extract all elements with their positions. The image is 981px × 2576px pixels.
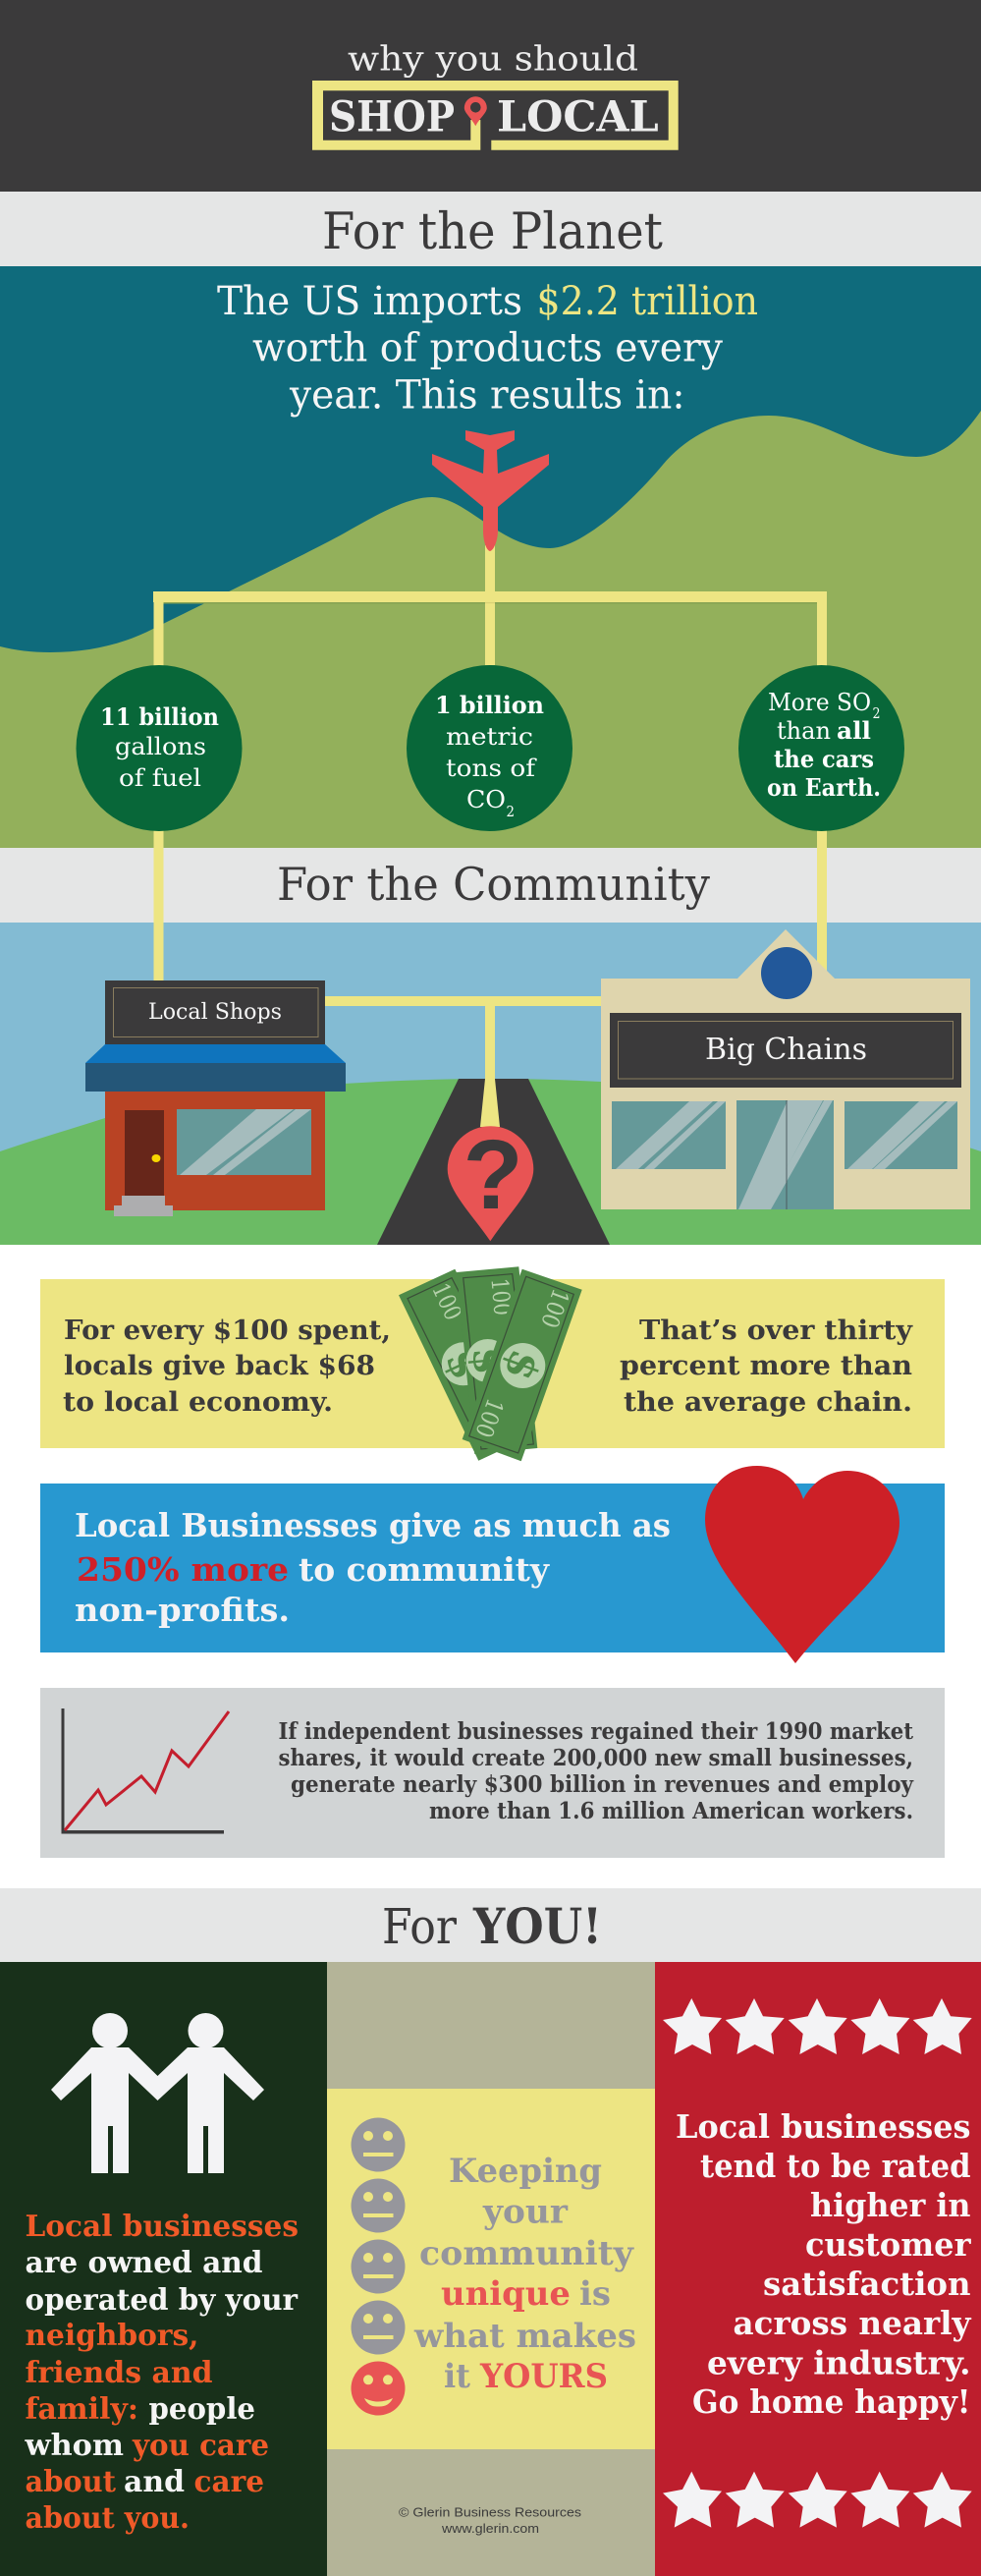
logo: shop local xyxy=(312,81,679,150)
text: owned by neighbors: friends and xyxy=(26,2356,213,2390)
text: keeping your community unique: unique xyxy=(441,2274,571,2313)
icon: dollar bills: 100 xyxy=(426,1279,467,1324)
text: rated higher: customer xyxy=(805,2225,971,2264)
text: market share claim: more than 1.6 million American workers. xyxy=(429,1798,913,1824)
icon: neutral face 3 xyxy=(352,2240,405,2293)
text: owned by neighbors: and xyxy=(124,2465,185,2499)
text: keeping your community unique: is xyxy=(579,2274,611,2313)
icon: smiling face xyxy=(352,2362,405,2415)
local shops sign xyxy=(105,980,325,1044)
panel: yellow stat card xyxy=(40,1266,945,1461)
stat: 1 billion metric tons of CO2: tons of xyxy=(446,755,537,782)
awning xyxy=(85,1044,346,1092)
text: 250 percent more xyxy=(75,1506,671,1629)
icon: airplane xyxy=(432,430,549,551)
text: imports statement xyxy=(217,279,758,419)
icon: dollar bills xyxy=(399,1266,582,1461)
panel: neighbors xyxy=(0,1962,327,2576)
heading: for the community: For the Community xyxy=(277,858,710,911)
heading: for you: For xyxy=(382,1898,457,1955)
icon: neutral face 2 xyxy=(352,2179,405,2232)
text: keeping your community unique xyxy=(413,2152,636,2395)
icon: dollar bills: $ xyxy=(463,1345,512,1376)
text: owned by neighbors: Local businesses xyxy=(26,2210,299,2244)
text: rated higher: Go home happy! xyxy=(692,2382,970,2421)
text: owned by neighbors: people xyxy=(149,2392,255,2427)
text: rated higher: across nearly xyxy=(733,2304,972,2342)
stat: more SO2 than all the cars on Earth: than xyxy=(777,717,831,745)
band: for the community background xyxy=(0,848,981,923)
icon: two people holding hands xyxy=(51,2013,264,2173)
text: keeping your community unique: YOURS xyxy=(479,2357,608,2395)
stat: more SO2 than all the cars on Earth: on Earth. xyxy=(767,773,881,802)
text: keeping your community unique: community xyxy=(419,2234,635,2272)
text: rated higher: higher in xyxy=(810,2186,970,2224)
text: every 100 dollars: to local economy. xyxy=(63,1386,333,1418)
panel: grey market share card xyxy=(40,1688,945,1858)
illustration: big chain store xyxy=(601,929,970,1209)
text: thirty percent more xyxy=(620,1315,913,1418)
panel: customer satisfaction xyxy=(655,1962,981,2576)
text: owned by neighbors: whom xyxy=(24,2429,124,2463)
stat: more SO2 than all the cars on Earth: 2 xyxy=(872,704,880,722)
steps xyxy=(114,1196,173,1216)
logo: shop local: LOCAL xyxy=(497,92,659,141)
text: owned by neighbors: care xyxy=(194,2465,264,2499)
text: market share claim: shares, it would create 200,000 new small businesses, xyxy=(279,1745,913,1771)
stat: 11 billion gallons of fuel xyxy=(77,665,242,831)
text: imports statement: The US imports xyxy=(217,279,522,324)
text: thirty percent more: percent more than xyxy=(620,1350,912,1381)
stat: more SO2 than all the cars on Earth: all xyxy=(837,716,871,745)
icon: top row of stars xyxy=(663,1998,972,2054)
stat: 11 billion gallons of fuel: of fuel xyxy=(119,764,201,792)
text: imports statement: year. This results in: xyxy=(289,373,685,419)
icon: dollar bills: 100 xyxy=(485,1277,517,1316)
right window xyxy=(845,1101,957,1169)
panel: keeping community unique xyxy=(327,1962,655,2576)
text: market share claim: If independent businesses regained their 1990 market xyxy=(279,1718,913,1745)
text: keeping your community unique: it xyxy=(444,2357,471,2395)
stat: more SO2 than all the cars on Earth xyxy=(738,665,904,831)
header xyxy=(0,0,981,192)
text: keeping your community unique: your xyxy=(482,2193,568,2230)
stat: 1 billion metric tons of CO2: metric xyxy=(446,723,533,751)
local shops sign: Local Shops xyxy=(148,1000,282,1025)
arrow: yellow connector tree xyxy=(153,545,827,984)
icon: heart xyxy=(705,1466,899,1663)
text: owned by neighbors: you care xyxy=(132,2429,269,2463)
road xyxy=(377,1079,610,1245)
text: copyright credit xyxy=(399,2505,582,2536)
text: rated higher: Local businesses xyxy=(676,2107,970,2146)
illustration: local shop xyxy=(85,980,346,1216)
text: owned by neighbors: are owned and xyxy=(26,2246,263,2280)
door xyxy=(125,1110,164,1196)
text: owned by neighbors: about you. xyxy=(26,2501,190,2536)
text: owned by neighbors: about xyxy=(26,2465,116,2499)
text: keeping your community unique: Keeping xyxy=(449,2152,602,2190)
panel: community sky and hill xyxy=(0,923,981,1245)
stat: 1 billion metric tons of CO2 xyxy=(407,665,572,831)
icon: dollar bills: 100 xyxy=(469,1395,509,1441)
text: thirty percent more: the average chain. xyxy=(624,1386,912,1418)
text: owned by neighbors: neighbors, xyxy=(26,2319,198,2353)
panel: planet background xyxy=(0,266,981,848)
text: 250 percent more: to community xyxy=(299,1550,550,1589)
text: copyright credit: www.glerin.com xyxy=(441,2521,539,2536)
icon: question mark pin: ? xyxy=(463,1120,523,1230)
stat: 11 billion gallons of fuel: 11 billion xyxy=(100,702,219,731)
text: imports statement: worth of products every xyxy=(252,326,723,371)
text: rated higher xyxy=(676,2107,972,2421)
text: owned by neighbors: family: xyxy=(26,2392,138,2427)
text: market share claim xyxy=(279,1718,914,1824)
text: copyright credit: © Glerin Business Resources xyxy=(399,2505,582,2519)
text: market share claim: generate nearly $300 billion in revenues and employ xyxy=(291,1771,914,1798)
big chains sign xyxy=(610,1013,961,1088)
text: 250 percent more: non-profits. xyxy=(75,1591,290,1629)
stat: 11 billion gallons of fuel: gallons xyxy=(115,733,206,760)
text: thirty percent more: That’s over thirty xyxy=(639,1315,913,1346)
heading: for you xyxy=(0,1888,981,1962)
stat: 1 billion metric tons of CO2: 1 billion xyxy=(435,691,544,719)
logo: shop local: SHOP xyxy=(329,92,455,141)
stat: more SO2 than all the cars on Earth: the cars xyxy=(774,745,874,773)
text: 250 percent more: Local Businesses give as much as xyxy=(75,1506,671,1544)
text: keeping your community unique: what makes xyxy=(413,2317,636,2355)
heading: for the planet xyxy=(0,192,981,266)
glass door xyxy=(736,1100,834,1209)
left window xyxy=(612,1101,726,1169)
arrow: connector between shops and road xyxy=(325,996,610,1127)
stat: more SO2 than all the cars on Earth: More SO xyxy=(768,689,871,716)
text: rated higher: tend to be rated xyxy=(700,2147,970,2185)
panel: blue non-profit card xyxy=(40,1466,945,1663)
big chains sign: Big Chains xyxy=(705,1033,867,1067)
icon: dollar bills: 100 xyxy=(535,1285,574,1331)
icon: bottom row of stars xyxy=(663,2472,972,2528)
text: every 100 dollars: locals give back $68 xyxy=(64,1350,375,1381)
text: owned by neighbors: operated by your xyxy=(26,2283,299,2318)
text: rated higher: every industry. xyxy=(707,2344,970,2381)
icon: neutral face 1 xyxy=(352,2118,405,2171)
stat: 1 billion metric tons of CO2: CO xyxy=(466,786,506,813)
text: owned by neighbors xyxy=(24,2210,299,2536)
icon: dollar bills: $ xyxy=(436,1342,489,1386)
icon: neutral face 4 xyxy=(352,2301,405,2354)
text: imports statement: $2.2 trillion xyxy=(536,279,758,324)
heading: for the planet: For the Planet xyxy=(322,203,663,261)
text: every 100 dollars xyxy=(63,1315,391,1418)
text: rated higher: satisfaction xyxy=(763,2265,970,2303)
text: 250 percent more: 250% more xyxy=(77,1550,289,1589)
text: every 100 dollars: For every $100 spent, xyxy=(64,1315,391,1346)
icon: dollar bills: $ xyxy=(495,1344,550,1387)
chart: rising line graph xyxy=(61,1708,229,1833)
stat: 1 billion metric tons of CO2: 2 xyxy=(507,803,515,820)
icon: question mark pin xyxy=(448,1120,533,1241)
shop window xyxy=(177,1109,311,1175)
heading: for you: YOU! xyxy=(472,1897,602,1955)
title: why you should: why you should xyxy=(348,40,638,80)
